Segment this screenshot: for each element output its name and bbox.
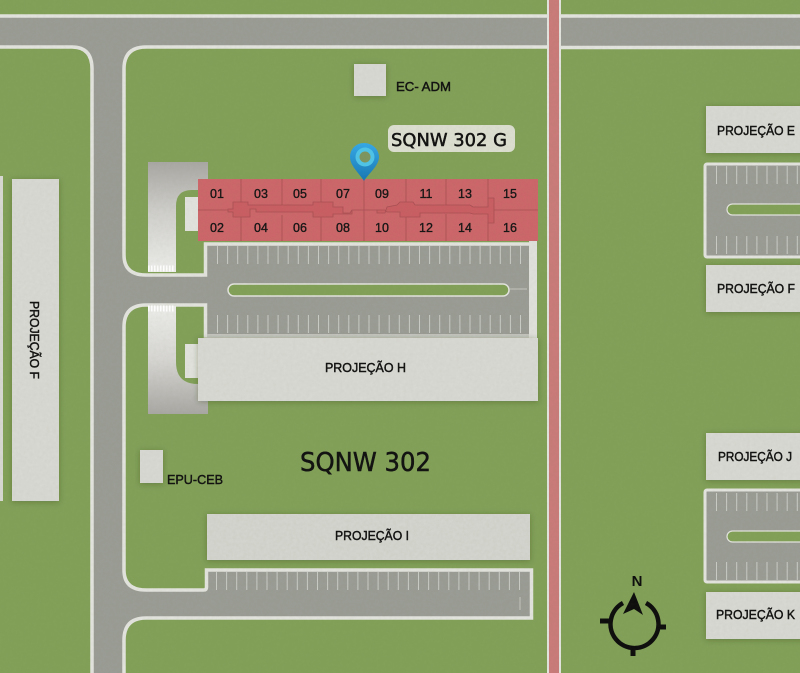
icon: north compass — [600, 573, 666, 656]
building: EC-ADM: EC- ADM — [396, 79, 451, 94]
building: Projeção F (right) — [706, 265, 800, 312]
parking: lower right lot — [705, 490, 800, 582]
unit numbers: 07 — [336, 187, 350, 201]
unit numbers: 15 — [503, 187, 517, 201]
building: Projeção J — [706, 433, 800, 480]
unit numbers: 05 — [293, 187, 307, 201]
unit numbers: 06 — [293, 221, 307, 235]
unit numbers: 16 — [503, 221, 517, 235]
building: Projeção F (left) — [12, 179, 59, 501]
building: Projeção I: PROJEÇÃO I — [335, 528, 409, 543]
unit numbers: 11 — [420, 187, 433, 201]
unit numbers: 04 — [254, 221, 268, 235]
building: Projeção K — [706, 592, 800, 639]
unit numbers: 09 — [375, 187, 389, 201]
unit numbers: 13 — [458, 187, 472, 201]
building: EC-ADM — [354, 64, 451, 96]
median strip — [547, 0, 561, 673]
plaza: upper access — [148, 162, 208, 272]
building: EPU-CEB — [140, 450, 223, 487]
building: Projeção I — [207, 514, 530, 560]
highlighted building SQNW 302 G with units — [198, 179, 538, 241]
label: SQNW 302 G: SQNW 302 G — [391, 130, 507, 151]
building: Projeção H — [198, 338, 538, 401]
building: Projeção H: PROJEÇÃO H — [325, 360, 406, 375]
unit numbers: 08 — [336, 221, 350, 235]
parking: lower lot markings — [216, 581, 520, 610]
unit numbers: 14 — [458, 221, 472, 235]
building: Projeção F (right): PROJEÇÃO F — [717, 281, 795, 296]
unit numbers: 02 — [210, 221, 224, 235]
building: Projeção K: PROJEÇÃO K — [716, 607, 795, 622]
building: EPU-CEB: EPU-CEB — [167, 472, 223, 487]
unit dividers — [198, 179, 538, 241]
parking: upper right lot — [705, 164, 800, 257]
unit numbers: 03 — [254, 187, 268, 201]
building: Projeção J: PROJEÇÃO J — [718, 449, 792, 464]
icon: north compass: N — [632, 573, 642, 590]
unit numbers: 12 — [419, 221, 433, 235]
unit numbers: 01 — [210, 187, 224, 201]
unit numbers: 10 — [375, 221, 389, 235]
building: Projeção F (left): PROJEÇÃO F — [27, 301, 42, 379]
corridor outline — [228, 198, 494, 223]
grass block with parking cut-outs — [124, 47, 552, 673]
building: partial block at left edge — [0, 176, 3, 501]
label: SQNW 302: SQNW 302 — [300, 448, 431, 478]
plaza: lower access — [148, 306, 208, 414]
building: Projeção E: PROJEÇÃO E — [717, 123, 795, 138]
building: Projeção E — [706, 106, 800, 153]
unit numbers — [210, 187, 517, 235]
parking: main lot markings — [207, 241, 537, 339]
icon: location pin — [350, 143, 379, 181]
